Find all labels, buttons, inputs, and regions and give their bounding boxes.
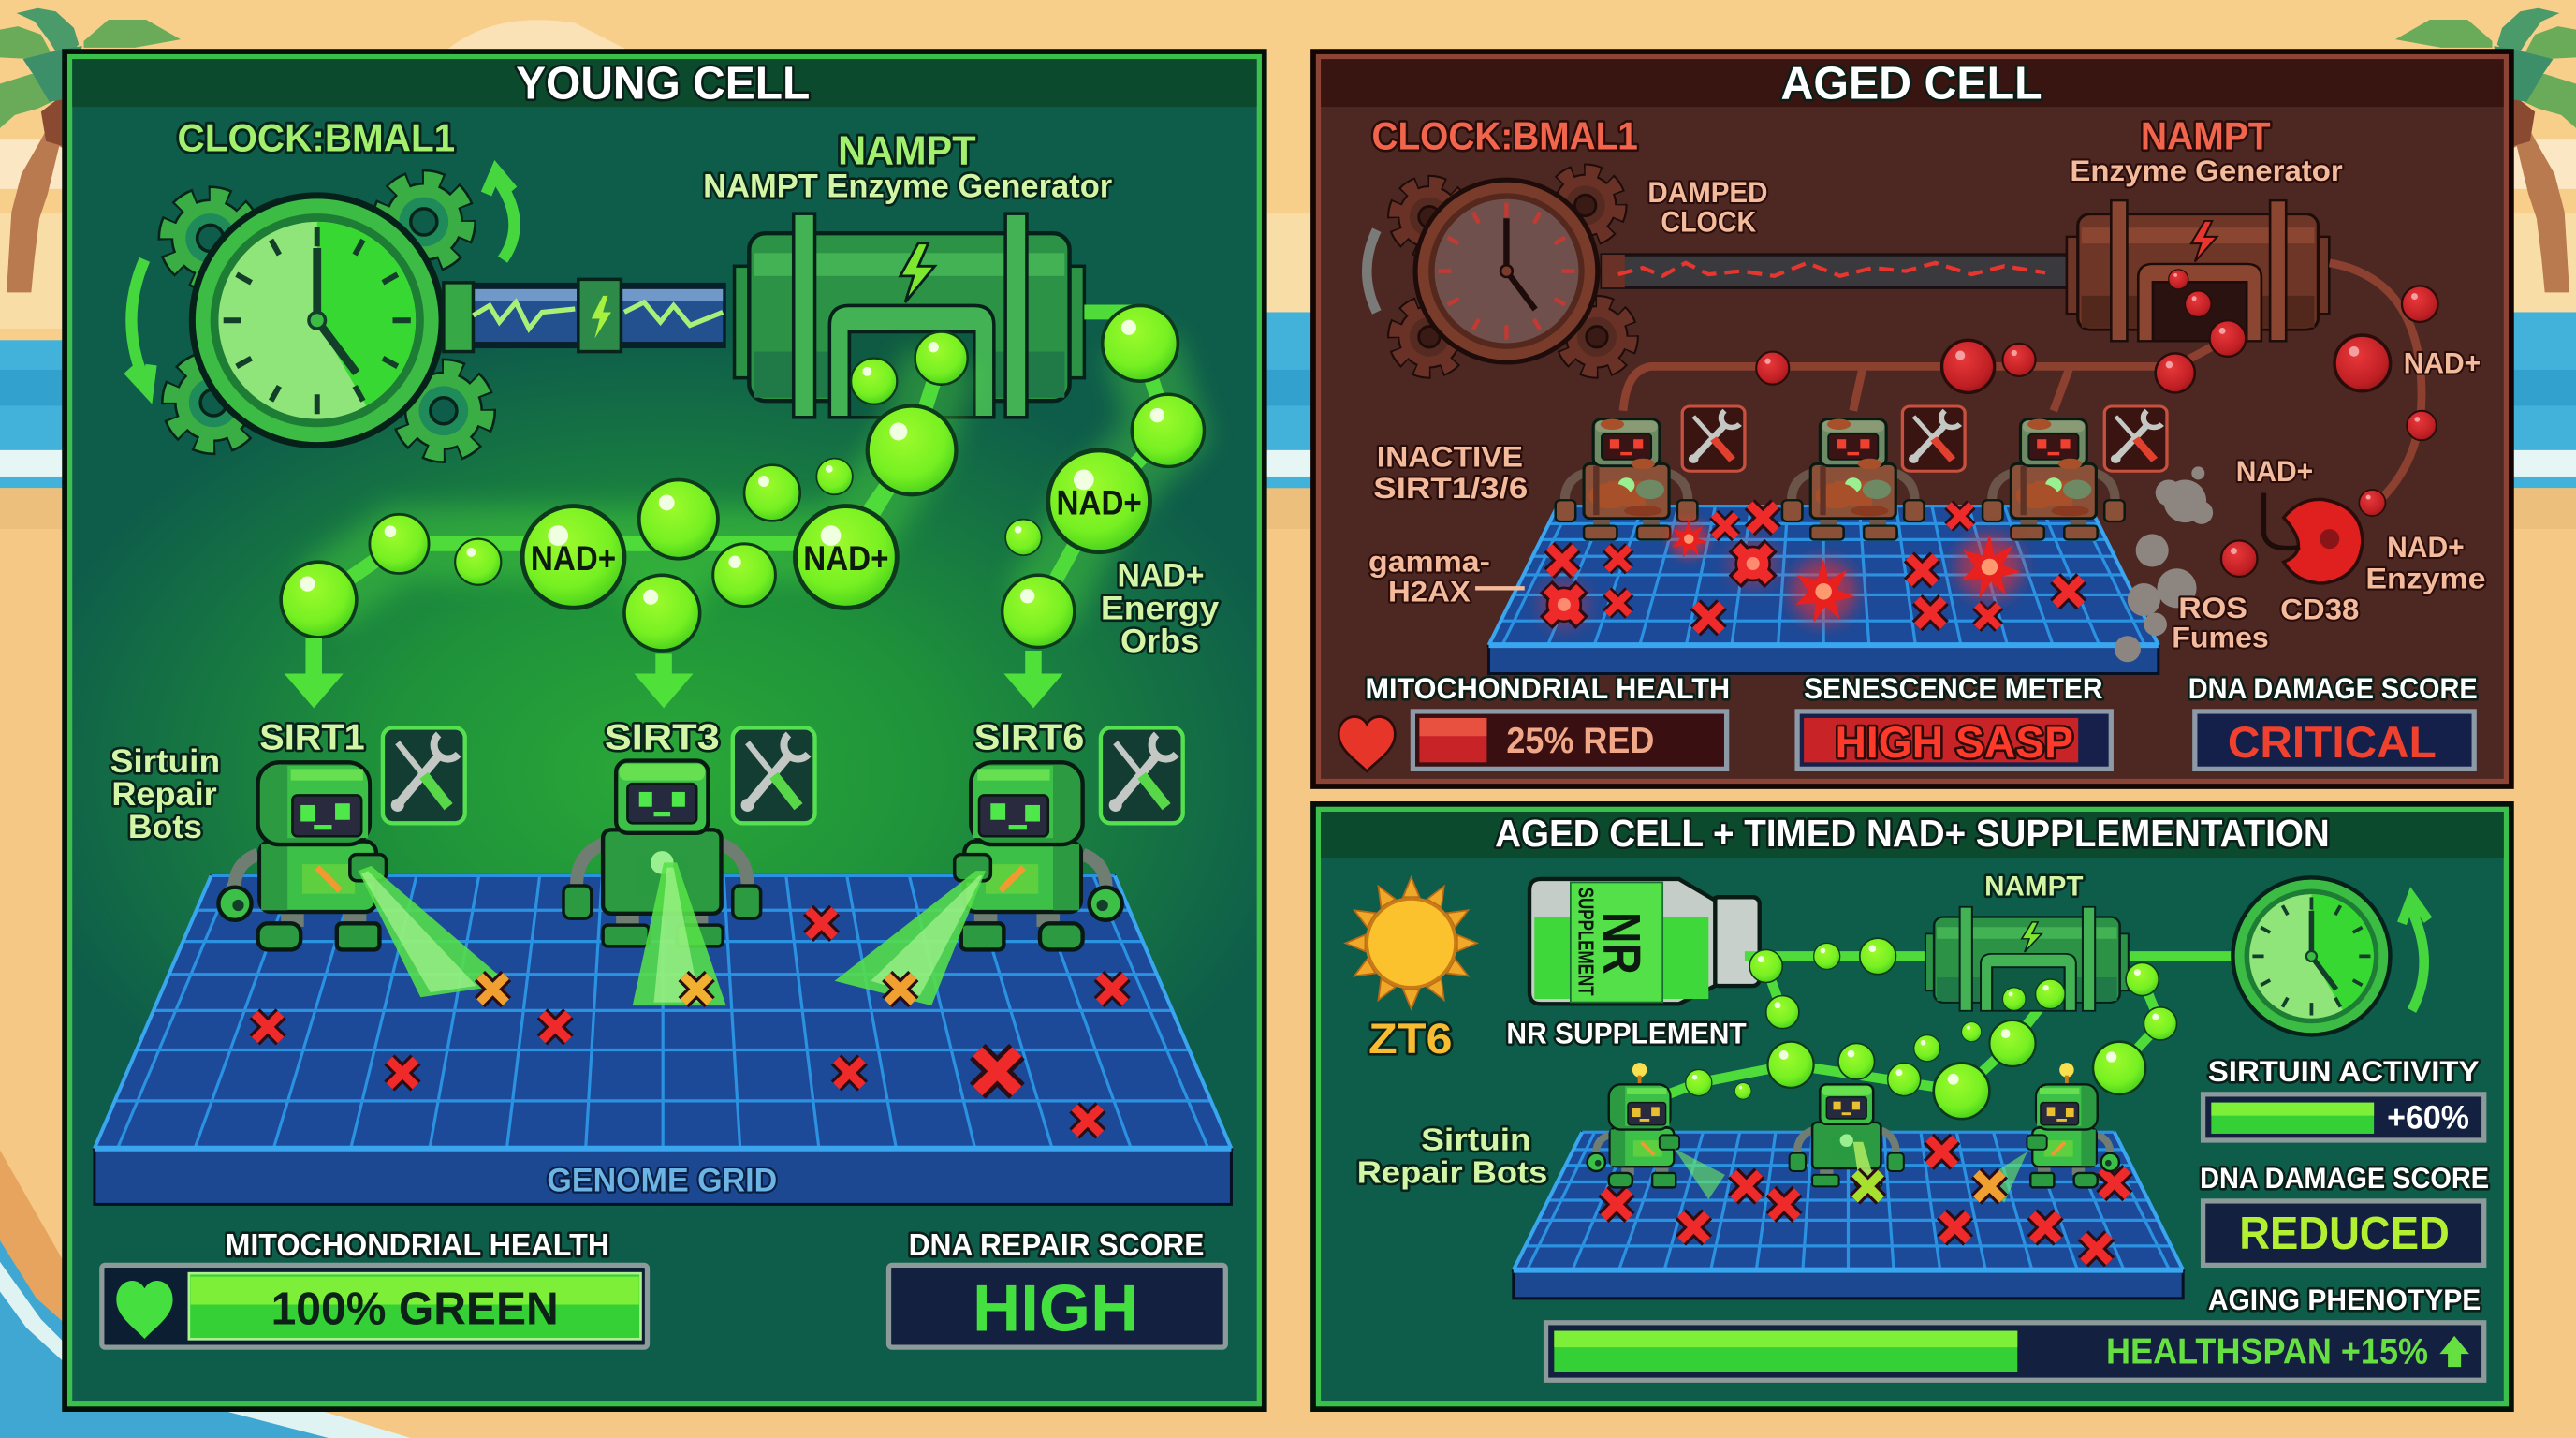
DNA damage marks [255, 910, 1125, 1134]
label: CLOCK:BMAL1 aged: CLOCK:BMAL1 [1372, 114, 1638, 158]
DNA damage marks and gamma-H2AX foci [1540, 505, 2082, 631]
labels: aged stats: SENESCENCE METER [1804, 671, 2103, 705]
arrow: clock rotation right [487, 171, 515, 259]
bot: repair 3 [2027, 1063, 2119, 1187]
label: NAMPT aged: NAMPT [2141, 114, 2271, 158]
label: NAD+ energy orbs: Energy [1101, 591, 1220, 627]
panel: aged cell plus timed NAD+ supplementation [1314, 805, 2510, 1408]
labels: aged stats: DNA DAMAGE SCORE [2188, 671, 2478, 705]
bot: SIRT1 [218, 762, 386, 949]
icon: circadian clock [189, 192, 446, 448]
arrow: weak rotation [1367, 230, 1377, 312]
icon: palm tree right [2395, 8, 2576, 292]
meter: mitochondrial health 25%: 25% RED [1506, 721, 1654, 761]
label: CLOCK:BMAL1: CLOCK:BMAL1 [178, 115, 455, 159]
labels: aged cell annotations: NAD+ [2387, 530, 2465, 564]
label: NR supplement: NR SUPPLEMENT [1506, 1016, 1747, 1049]
meter: mitochondrial health 100% [102, 1265, 648, 1347]
icon: NR supplement bottle [1530, 879, 1760, 1004]
labels: aged cell annotations [1368, 439, 2485, 653]
labels: SIRT1, SIRT3, SIRT6 [259, 717, 1084, 757]
meter: senescence high SASP: HIGH SASP [1835, 718, 2073, 768]
bot: SIRT6 [955, 762, 1122, 949]
icon: NR supplement bottle: SUPPLEMENT [1574, 888, 1599, 996]
arrow: clock rotation [2402, 897, 2428, 1010]
labels: aged cell annotations: CD38 [2280, 593, 2359, 626]
labels: aged cell annotations: Enzyme [2365, 561, 2485, 594]
label: NAD+: NAD+ [2404, 345, 2481, 379]
connector: NAD+ into CD38 [2264, 493, 2300, 549]
labels: SIRT1, SIRT3, SIRT6: SIRT1 [259, 717, 365, 757]
conduit: weak signal [1602, 255, 2070, 287]
icon: clock gears [168, 179, 487, 453]
score: DNA damage critical: CRITICAL [2228, 718, 2437, 768]
label: NAD+ energy orbs [1101, 558, 1220, 660]
panel: aged cell [1314, 52, 2510, 785]
icon: palm tree left [0, 8, 181, 292]
icons: broken tools [1682, 406, 2167, 471]
label: damped clock [1647, 175, 1767, 238]
label: DNA damage score timed: DNA DAMAGE SCORE [2200, 1161, 2489, 1195]
icon: restored clock [2231, 875, 2393, 1037]
score: DNA damage critical [2195, 712, 2474, 769]
bot: rusted 3 [1983, 419, 2125, 539]
heading: aged cell: AGED CELL [1781, 58, 2042, 109]
heading: timed supplementation: AGED CELL + TIMED NAD+ SUPPLEMENTATION [1495, 812, 2330, 855]
label: sirtuin repair bots [110, 743, 220, 845]
icon: red heart [1339, 716, 1395, 771]
icons: repair tools [383, 727, 1183, 823]
NAD+ energy orbs: NAD+ [531, 539, 616, 578]
icon: rusted gears [1395, 171, 1631, 371]
repair beams timed [1674, 1142, 2027, 1203]
labels: aged cell annotations: gamma- [1368, 545, 1490, 579]
label: NAD+ energy orbs: NAD+ [1117, 558, 1204, 594]
label: damped clock: CLOCK [1661, 204, 1756, 238]
repair bots timed [1588, 1063, 2119, 1187]
NAD+ energy orbs: NAD+ [1057, 483, 1142, 521]
labels: aged cell annotations: NAD+ [2236, 454, 2313, 488]
labels: SIRT1, SIRT3, SIRT6: SIRT3 [605, 717, 720, 757]
DNA damage marks timed [1603, 1138, 2128, 1262]
icon: NAMPT generator [735, 213, 1084, 418]
label: enzyme generator: Enzyme Generator [2070, 154, 2343, 187]
labels: aged stats: MITOCHONDRIAL HEALTH [1365, 671, 1730, 705]
meter: sirtuin activity +60%: +60% [2387, 1100, 2469, 1137]
labels: SIRT1, SIRT3, SIRT6: SIRT6 [974, 717, 1084, 757]
meter: mitochondrial health 100%: 100% GREEN [271, 1284, 559, 1335]
label: sirtuin repair bots: Sirtuin [110, 743, 220, 780]
NAD+ energy orbs: NAD+ [803, 539, 889, 578]
score: DNA repair high: HIGH [973, 1271, 1138, 1345]
labels: aged cell annotations: ROS [2178, 591, 2247, 624]
score: DNA repair high [889, 1265, 1225, 1347]
repair beams [359, 862, 986, 1005]
meter: healthspan +15%: HEALTHSPAN +15% [2106, 1332, 2428, 1372]
connector: flow line [1660, 956, 2237, 1097]
label: sirtuin repair bots: Repair [111, 776, 217, 813]
labels: aged stats [1365, 671, 2478, 705]
labels: aged cell annotations: INACTIVE [1377, 439, 1523, 473]
icon: CD38 enzyme [2284, 499, 2363, 583]
label: sirtuin repair bots: Bots [128, 809, 202, 845]
score: DNA damage reduced: REDUCED [2239, 1209, 2450, 1259]
icon: ROS fumes [2115, 466, 2213, 662]
bot: SIRT3 [564, 761, 761, 946]
labels: aged cell annotations: Fumes [2172, 620, 2269, 653]
conduit: clock to NAMPT [444, 279, 726, 352]
meter: sirtuin activity +60% [2203, 1094, 2484, 1140]
meter: mitochondrial health 25% [1412, 712, 1727, 769]
heading: young cell: YOUNG CELL [516, 58, 810, 109]
panel: young cell [66, 52, 1264, 1408]
icon: damped clock [1412, 178, 1600, 365]
genome grid damaged [1488, 506, 2159, 674]
icon: NR supplement bottle: NR [1592, 912, 1651, 975]
label: damped clock: DAMPED [1647, 175, 1767, 209]
meter: healthspan +15% [1546, 1323, 2484, 1380]
labels: aged cell annotations: SIRT1/3/6 [1373, 471, 1528, 505]
label: NAMPT: NAMPT [838, 128, 976, 174]
icon: rusted NAMPT generator [2067, 200, 2329, 341]
connector lines: NAD+ flow [318, 312, 1168, 611]
bot: rusted 1 [1556, 419, 1697, 539]
label: NAMPT timed: NAMPT [1984, 871, 2083, 902]
label: NAD+ energy orbs: Orbs [1120, 624, 1199, 660]
glow: NAD+ energy [318, 344, 1168, 613]
genome grid timed [1514, 1132, 2183, 1299]
icon: sun [1345, 877, 1477, 1009]
arrows: to sirtuins [285, 638, 1063, 708]
label: sirtuin repair bots timed: Sirtuin [1421, 1123, 1531, 1158]
connector lines: weak NAD+ flow [1623, 263, 2422, 501]
score: DNA damage reduced [2203, 1201, 2484, 1265]
orbs: timed NAD+ [1686, 938, 2177, 1119]
bot: repair 1 [1588, 1063, 1679, 1187]
labels: aged cell annotations: H2AX [1388, 574, 1471, 608]
meter: senescence high SASP [1797, 712, 2111, 769]
icon: NAMPT generator timed [1925, 907, 2129, 1011]
genome grid platform [95, 875, 1231, 1204]
rusted bots [1556, 419, 2125, 539]
repair bots [218, 761, 1122, 949]
label: DNA repair score: DNA REPAIR SCORE [909, 1228, 1204, 1263]
label: genome grid: GENOME GRID [547, 1162, 777, 1198]
bot: repair 2 [1790, 1084, 1904, 1186]
label: aging phenotype: AGING PHENOTYPE [2208, 1283, 2481, 1316]
label: NAMPT enzyme generator: NAMPT Enzyme Generator [703, 169, 1113, 205]
label: mitochondrial health: MITOCHONDRIAL HEALTH [225, 1228, 609, 1263]
label: sirtuin repair bots timed: Repair Bots [1357, 1156, 1547, 1191]
label: sirtuin repair bots timed [1357, 1123, 1547, 1191]
NAD+ red orbs [1756, 270, 2438, 577]
label: ZT6: ZT6 [1368, 1015, 1453, 1063]
bot: rusted 2 [1782, 419, 1925, 539]
arrow: clock rotation left [128, 259, 151, 391]
label: sirtuin activity: SIRTUIN ACTIVITY [2208, 1054, 2479, 1088]
NAD+ energy orbs [281, 305, 1204, 651]
